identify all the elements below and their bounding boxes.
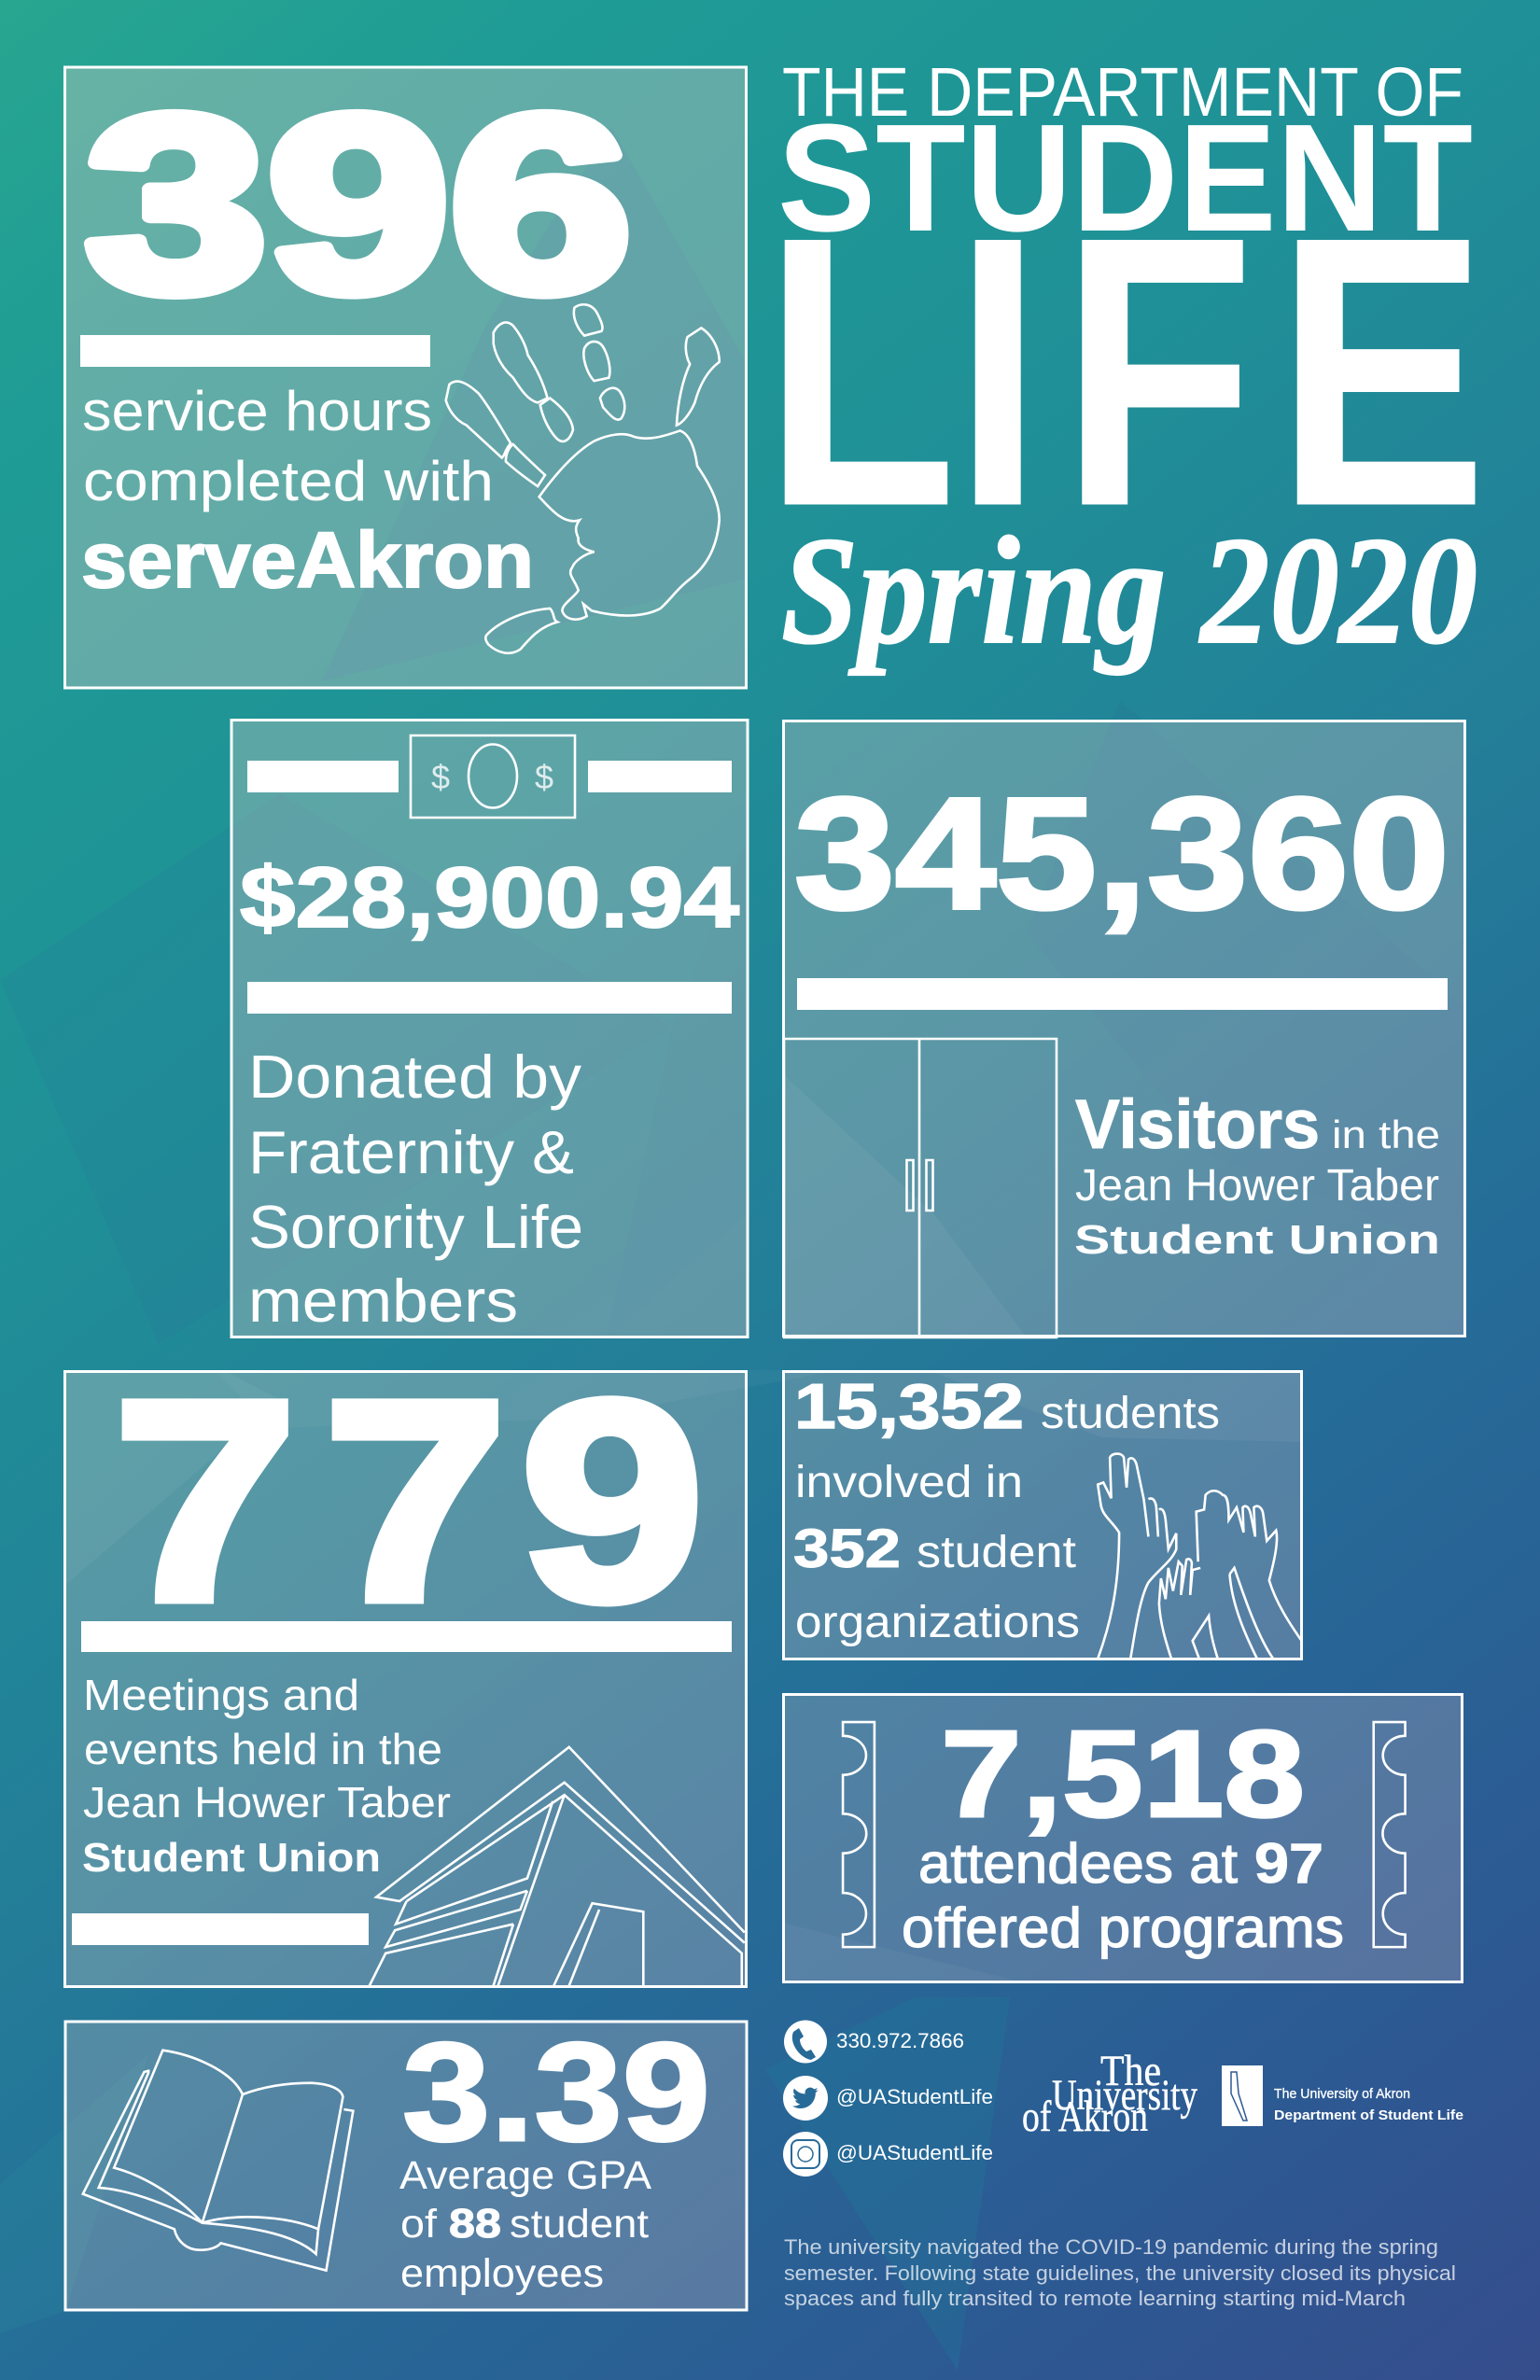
logo: The University of Akron: The [1100,2047,1161,2095]
caption: attendees at [918,1832,1238,1895]
text block: organizations [795,1598,1080,1647]
title: THE DEPARTMENT OF [782,53,1463,131]
right bar [588,761,732,792]
caption: offered programs [902,1897,1344,1959]
panel: fraternity and sorority donations [231,721,748,1337]
caption: Jean Hower Taber [83,1778,451,1827]
caption [399,2153,651,2296]
left bar [247,761,399,792]
contact: instagram: @UAStudentLife [836,2141,993,2164]
caption: Fraternity & [248,1118,574,1186]
amount: $28,900.94 [240,850,739,945]
logo: The University of Akron: of Akron [1022,2093,1148,2141]
COVID note: semester. Following state guidelines, the university closed its physical [784,2261,1456,2285]
caption: serveAkron [81,516,534,604]
title: Spring 2020 [781,505,1477,676]
caption [248,1043,583,1335]
icon: ticket right [1374,1722,1406,1947]
divider bar [81,1621,732,1652]
text block: students [1041,1389,1220,1438]
caption: Donated by [248,1043,582,1111]
logo: The University of Akron [1022,2047,1197,2141]
logo: Department of Student Life: The University of Akron [1274,2086,1410,2102]
big number 396: 396 [85,63,632,343]
caption: Sorority Life [248,1193,583,1261]
caption: Jean Hower Taber [1075,1161,1439,1211]
text block [793,1371,1220,1647]
logo: Department of Student Life: Department of Student Life [1274,2107,1463,2123]
icon: raised hands [1098,1454,1302,1659]
icon: double doors [784,1039,1057,1337]
divider bar [247,982,732,1014]
logo: Department of Student Life [1222,2065,1463,2126]
contact: phone [784,2020,964,2063]
caption: Student Union [82,1835,381,1881]
title: LIFE [763,158,1488,587]
icon: ticket left [843,1722,875,1947]
panel: GPA [65,2013,747,2310]
caption [1074,1085,1440,1263]
caption: 88 [449,2201,501,2247]
caption: student [510,2202,649,2247]
caption: Average GPA [399,2153,651,2198]
caption [81,380,534,604]
COVID note: The university navigated the COVID-19 pandemic during the spring [784,2235,1438,2259]
divider bar [80,335,430,367]
contact: twitter: @UAStudentLife [836,2085,993,2108]
text block: 352 [793,1519,901,1579]
caption: employees [400,2251,604,2296]
text block: student [917,1528,1076,1577]
icon: dollar bill [411,735,575,818]
caption: members [248,1267,518,1335]
panel: meetings and events [65,1342,747,1987]
big number: 7,518 [941,1705,1305,1842]
caption: completed with [83,450,494,512]
icon: dollar bill: $ [535,758,553,796]
panel: program attendees [784,1695,1462,1982]
title [763,53,1488,676]
icon: dollar bill: $ [431,758,450,796]
panel: 396 service hours [65,63,747,688]
caption [902,1832,1344,1959]
lower bar [72,1913,369,1945]
caption: in the [1332,1113,1440,1156]
caption: of [400,2202,438,2247]
caption: Student Union [1074,1217,1440,1263]
COVID note [784,2235,1456,2310]
contact: instagram [783,2132,993,2177]
panel: union visitors [784,721,1465,1337]
caption: service hours [82,380,432,442]
COVID note: spaces and fully transited to remote learning starting mid-March [784,2287,1406,2310]
caption: Visitors [1075,1085,1320,1163]
caption: 97 [1254,1832,1323,1895]
caption: events held in the [84,1725,442,1773]
logo: The University of Akron: University [1052,2071,1197,2120]
big number: 3.39 [402,2013,710,2170]
text block: involved in [795,1458,1023,1507]
icon: student union building [370,1747,745,1987]
caption: Meetings and [83,1671,359,1719]
divider bar [797,978,1448,1010]
contact: twitter [783,2076,993,2121]
title: STUDENT [777,92,1473,263]
caption [82,1671,451,1881]
text block: 15,352 [794,1371,1024,1442]
icon: handprint [446,304,720,653]
panel: student organizations [784,1371,1302,1659]
big number: 345,360 [794,765,1449,943]
icon: open book [83,2051,353,2271]
contact: phone: 330.972.7866 [836,2029,964,2052]
big number: 779 [114,1342,704,1659]
